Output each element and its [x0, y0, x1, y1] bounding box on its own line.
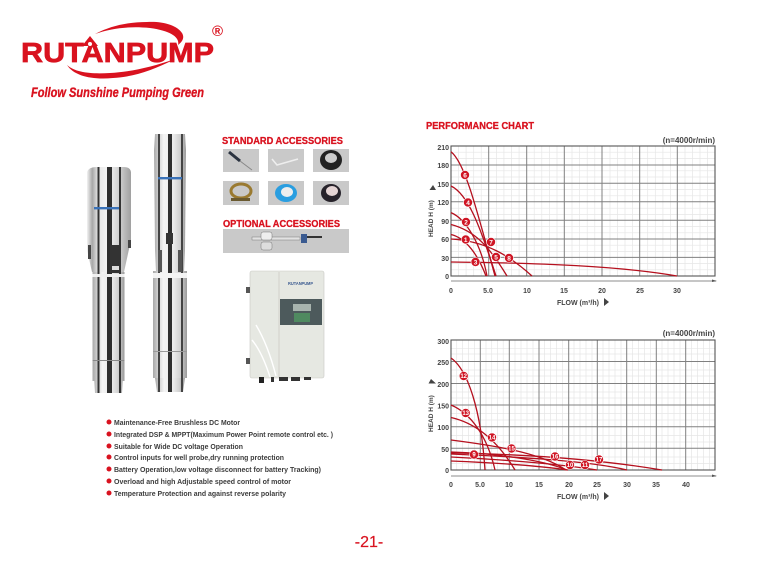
registered mark: ® — [212, 23, 223, 40]
chart 1 y axis labels: 30 — [441, 256, 449, 263]
accessory: hex key — [268, 149, 304, 172]
accessory: insulation tape — [313, 181, 349, 205]
chart 2 markers: 15 — [508, 446, 515, 452]
chart 1 markers: 8 — [507, 256, 511, 262]
chart 1 markers: 1 — [464, 237, 468, 244]
heading: standard accessories: STANDARD ACCESSORIES — [222, 136, 343, 147]
feature list — [106, 418, 333, 498]
feature list: Maintenance-Free Brushless DC Motor — [114, 418, 240, 427]
chart 2 y axis labels: 100 — [437, 425, 449, 432]
chart 1: head vs flow: 5.0 — [483, 288, 493, 295]
logo: Rutanpump — [21, 22, 223, 100]
chart 2 y axis labels: 0 — [445, 468, 449, 475]
chart 1 markers: 6 — [463, 172, 467, 180]
pump: left — [87, 167, 131, 393]
logo wordmark: RUTANPUMP — [21, 37, 214, 68]
feature list: Integrated DSP & MPPT(Maximum Power Point remote control etc. ) — [114, 430, 333, 439]
chart 2 speed note: (n=4000r/min) — [663, 329, 715, 338]
chart 1 markers: 3 — [474, 260, 478, 266]
chart 2 y axis labels: 50 — [441, 447, 449, 454]
chart 1: head vs flow — [428, 136, 717, 307]
accessory: PTFE tape — [268, 181, 304, 205]
chart 2: head vs flow: 10 — [505, 482, 513, 489]
chart 1: head vs flow: 25 — [636, 288, 644, 295]
chart 1 y axis labels: 60 — [441, 237, 449, 244]
chart 1 markers — [460, 170, 514, 266]
chart 1: head vs flow: 15 — [560, 288, 568, 295]
chart 2 y axis labels: 250 — [437, 360, 449, 367]
chart 1 markers: 7 — [489, 240, 493, 246]
solar pump controller — [246, 271, 324, 383]
slogan: Follow Sunshine Pumping Green — [31, 84, 204, 100]
chart 2 markers — [459, 372, 604, 470]
chart 1 x axis title: FLOW (m³/h) — [557, 300, 599, 307]
accessory: float switch — [223, 229, 349, 253]
feature list: Overload and high Adjustable speed control of motor — [114, 477, 291, 486]
chart 1 y axis title: HEAD H (m) — [428, 200, 435, 237]
chart 2: head vs flow: 15 — [535, 482, 543, 489]
chart 2 markers: 13 — [462, 411, 470, 417]
accessory: black tape — [313, 149, 349, 172]
chart 2 curves — [451, 358, 662, 470]
chart 1 y axis labels: 210 — [437, 145, 449, 152]
chart 1 markers: 4 — [466, 200, 470, 207]
logo swoosh — [67, 22, 183, 78]
pump: right — [153, 134, 187, 392]
chart 1 x axis — [451, 280, 716, 282]
chart 2 markers: 12 — [460, 374, 468, 380]
chart 2: head vs flow: 40 — [682, 482, 690, 489]
chart 1: head vs flow: 20 — [598, 288, 606, 295]
chart 1 markers: 5 — [494, 254, 498, 262]
chart 2 y axis labels: 300 — [437, 339, 449, 346]
chart 2: head vs flow: 25 — [593, 482, 601, 489]
accessory: hose clamp — [223, 181, 259, 205]
chart 2: head vs flow: 30 — [623, 482, 631, 489]
chart 2 x axis — [451, 475, 716, 477]
feature list: Suitable for Wide DC voltage Operation — [114, 442, 243, 451]
chart 2 markers: 14 — [489, 436, 496, 442]
chart 2: head vs flow: 5.0 — [475, 482, 485, 489]
chart 2: head vs flow: 0 — [449, 482, 453, 489]
chart 1 markers: 2 — [464, 220, 468, 226]
chart 2 y axis labels: 150 — [437, 404, 449, 410]
chart 1 y axis labels — [437, 145, 449, 281]
chart 1: head vs flow: 10 — [523, 288, 531, 295]
chart 2 y axis labels: 200 — [437, 382, 449, 389]
feature list: Battery Operation,low voltage disconnect for battery Tracking) — [114, 465, 321, 474]
chart 2 x axis title: FLOW (m³/h) — [557, 494, 599, 501]
feature list: Temperature Protection and against reverse polarity — [114, 489, 287, 498]
heading: optional accessories: OPTIONAL ACCESSORIES — [223, 219, 340, 230]
chart 2 y axis title: HEAD H (m) — [428, 395, 435, 432]
chart 2: head vs flow — [428, 329, 717, 501]
page number: -21- — [355, 534, 383, 551]
chart 2: head vs flow: 20 — [565, 482, 573, 489]
feature list: Control inputs for well probe,dry running protection — [114, 453, 284, 462]
chart 1 y axis labels: 90 — [441, 219, 449, 226]
chart 1: head vs flow: 30 — [673, 288, 681, 295]
chart 1 curves — [451, 152, 677, 276]
solar pump controller: RUTANPUMP — [288, 281, 313, 286]
chart 2 markers: 11 — [582, 463, 589, 469]
chart 2: head vs flow: 35 — [652, 482, 660, 489]
chart 1 y axis labels: 0 — [445, 274, 449, 281]
chart 1 y axis labels: 180 — [437, 163, 449, 170]
chart 2 markers: 17 — [596, 458, 603, 464]
heading: performance chart: PERFORMANCE CHART — [426, 121, 534, 132]
chart 1 y axis labels: 150 — [437, 182, 449, 189]
chart 1 speed note: (n=4000r/min) — [663, 136, 715, 145]
chart 2 markers: 9 — [472, 453, 476, 459]
chart 2 markers: 10 — [567, 463, 574, 469]
chart 2 markers: 16 — [552, 454, 559, 460]
accessory: screwdriver — [223, 149, 259, 172]
chart 1 y axis labels: 120 — [437, 200, 449, 207]
chart 2 y axis labels — [437, 339, 449, 475]
chart 1: head vs flow: 0 — [449, 288, 453, 295]
